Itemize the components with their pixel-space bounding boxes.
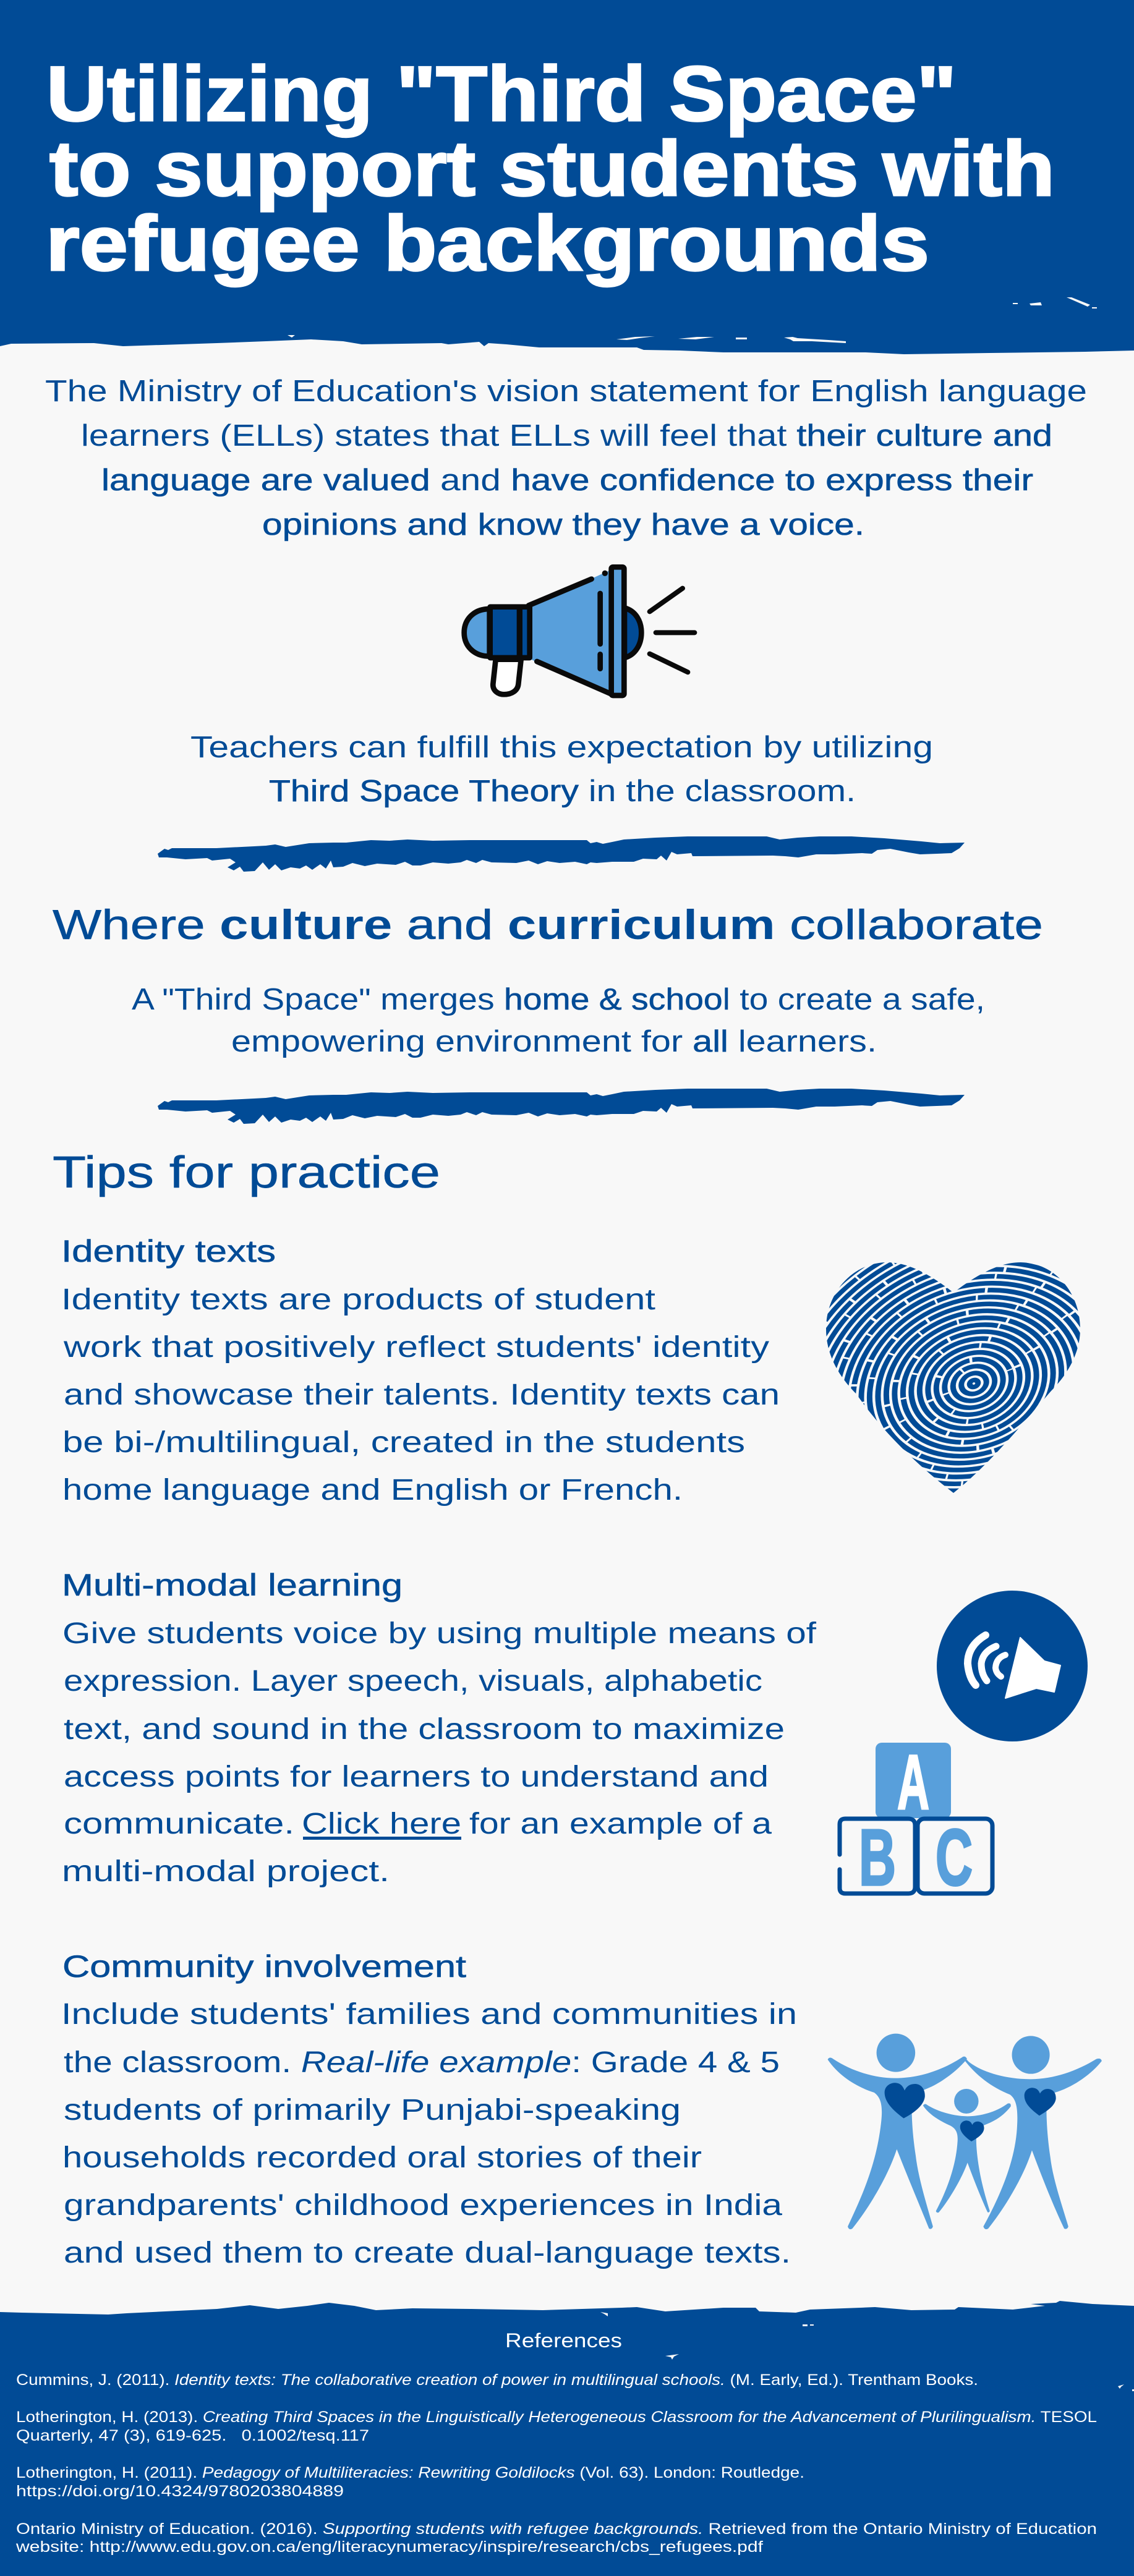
body: community involvement: households recorded oral stories of their	[62, 2141, 702, 2174]
icon: fingerprint heart	[826, 1262, 1080, 1493]
body: multi-modal learning: access points for learners to understand and	[64, 1761, 769, 1793]
icon: family with hearts	[828, 2034, 1102, 2229]
body: multi-modal learning: for an example of a	[469, 1808, 772, 1840]
body: identity texts: work that positively reflect students' identity	[63, 1331, 769, 1364]
body: multi-modal learning: Click here	[302, 1808, 461, 1840]
reference list: Quarterly, 47 (3), 619-625. 0.1002/tesq.117	[16, 2427, 369, 2444]
reference list: Cummins, J. (2011). Identity texts: The collaborative creation of power in multilingual schools. (M. Early, Ed.). Trentham Books.	[16, 2371, 978, 2389]
body: community involvement: grandparents' childhood experiences in India	[64, 2189, 782, 2222]
reference list: https://doi.org/10.4324/9780203804889	[16, 2483, 344, 2500]
body: identity texts	[61, 1283, 780, 1507]
body: multi-modal learning: multi-modal project.	[62, 1855, 390, 1888]
body: community involvement: and used them to create dual-language texts.	[64, 2237, 791, 2269]
body: community involvement	[61, 1998, 797, 2269]
body: community involvement: the classroom. Real-life example : Grade 4 & 5	[64, 2046, 780, 2079]
subheading: identity texts: Identity texts	[61, 1234, 276, 1269]
header banner	[0, 0, 1134, 354]
divider brush stroke	[158, 836, 965, 872]
body: identity texts: Identity texts are products of student	[61, 1283, 655, 1316]
reference list: Ontario Ministry of Education. (2016). Supporting students with refugee backgrounds. Retrieved from the Ontario Ministry of Education	[16, 2520, 1097, 2538]
reference list: Lotherington, H. (2011). Pedagogy of Multiliteracies: Rewriting Goldilocks (Vol. 63). London: Routledge.	[16, 2464, 804, 2481]
body: identity texts: home language and English or French.	[62, 1474, 683, 1507]
icon: ABC blocks: A	[897, 1740, 929, 1826]
panel: multi-modal learning	[62, 1568, 817, 1888]
icon: speaker circle	[937, 1591, 1088, 1741]
intro paragraph: opinions and know they have a voice.	[262, 508, 864, 542]
text: teachers statement: Teachers can fulfill this expectation by utilizing	[190, 731, 933, 764]
body: identity texts: be bi-/multilingual, created in the students	[62, 1426, 745, 1459]
icon: megaphone	[464, 567, 694, 695]
body: identity texts: and showcase their talents. Identity texts can	[64, 1379, 780, 1411]
body: community involvement: students of primarily Punjabi-speaking	[64, 2094, 681, 2127]
body: multi-modal learning: expression. Layer speech, visuals, alphabetic	[64, 1665, 762, 1698]
text: third space definition: empowering environment for all learners.	[231, 1025, 877, 1058]
title: to support students with	[49, 125, 1055, 212]
title: refugee backgrounds	[46, 200, 929, 287]
icon: ABC blocks: B	[859, 1813, 896, 1902]
text: third space definition	[132, 983, 985, 1058]
intro paragraph: language are valued and have confidence to express their	[101, 464, 1033, 497]
references	[15, 2329, 1097, 2556]
heading: tips for practice: Tips for practice	[53, 1148, 440, 1197]
footer banner	[0, 2301, 1134, 2576]
intro paragraph: learners (ELLs) states that ELLs will feel that their culture and	[81, 419, 1052, 453]
panel: identity texts	[61, 1234, 780, 1507]
text: teachers statement: Third Space Theory in the classroom.	[269, 775, 856, 808]
body: multi-modal learning: communicate.	[64, 1808, 294, 1840]
body: multi-modal learning: Give students voice by using multiple means of	[62, 1617, 817, 1650]
divider brush stroke	[158, 1089, 965, 1124]
subheading: community involvement: Community involvement	[62, 1949, 466, 1984]
heading: where culture and curriculum collaborate: Where culture and curriculum collaborate	[53, 901, 1043, 948]
subheading: multi-modal learning: Multi-modal learning	[62, 1568, 403, 1602]
body: multi-modal learning: text, and sound in the classroom to maximize	[64, 1713, 785, 1746]
intro paragraph: The Ministry of Education's vision statement for English language	[45, 375, 1087, 408]
panel: community involvement	[61, 1949, 797, 2269]
text: third space definition: A "Third Space" merges home & schoo l to create a safe,	[132, 983, 985, 1016]
body: multi-modal learning	[62, 1617, 817, 1888]
icon: ABC blocks: C	[936, 1813, 973, 1902]
reference list	[15, 2371, 1097, 2556]
body: community involvement: Include students' families and communities in	[61, 1998, 797, 2031]
references heading: References	[505, 2329, 622, 2352]
icon: ABC blocks	[840, 1740, 992, 1902]
title: Utilizing "Third Space"	[46, 50, 957, 137]
reference list: website: http://www.edu.gov.on.ca/eng/literacynumeracy/inspire/research/cbs_refugees.pdf	[15, 2538, 763, 2556]
reference list: Lotherington, H. (2013). Creating Third Spaces in the Linguistically Heterogeneous Classroom for the Advancement of Plurilingualism. TESOL	[16, 2408, 1097, 2426]
text: teachers statement	[190, 731, 933, 808]
intro paragraph	[45, 375, 1087, 542]
title	[46, 50, 1055, 287]
